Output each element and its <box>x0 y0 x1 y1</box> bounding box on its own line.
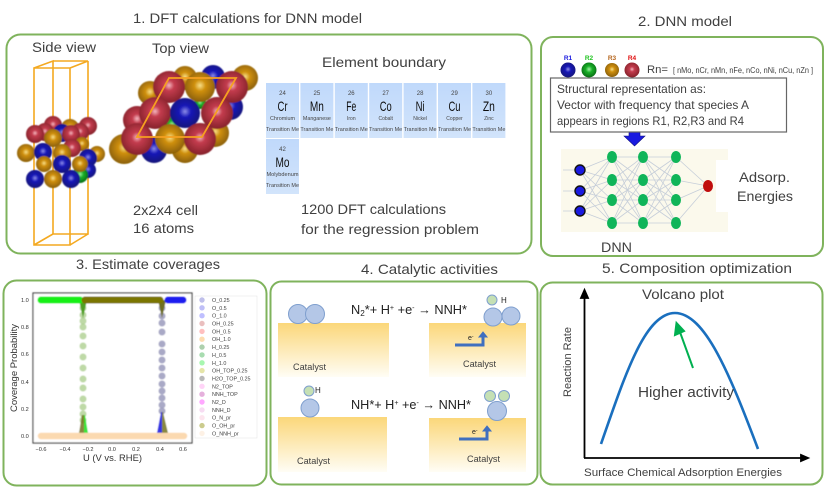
reaction 1 final state: Catalyst <box>463 359 496 370</box>
text: cell description: 16 atoms <box>133 220 194 236</box>
chart legend: N2_D <box>212 400 226 406</box>
text: DFT calculation count: 1200 DFT calculations <box>301 201 446 217</box>
equation: NH to NNH: - <box>416 400 420 407</box>
periodic table cells: Nickel <box>413 116 427 122</box>
periodic table cells: Co <box>380 98 392 114</box>
reaction 2 initial state: Catalyst <box>297 456 330 467</box>
chart legend: H_1.0 <box>212 361 226 367</box>
chart: coverage probability <box>33 293 192 443</box>
callout: structural representation: Structural representation as: <box>557 82 706 96</box>
periodic table cells: 42 <box>279 147 286 153</box>
chart axes <box>581 290 808 461</box>
volcano curve <box>601 313 758 449</box>
title: DNN model: 2. DNN model <box>638 13 732 29</box>
chart: volcano plot <box>581 290 808 461</box>
chart legend: H_0.5 <box>212 353 226 359</box>
periodic table cells <box>266 83 506 194</box>
label: adsorption energies: Energies <box>737 188 793 204</box>
icon: side view crystal structure <box>17 61 105 245</box>
equation: N2 to NNH: - <box>412 305 415 312</box>
periodic table cells: Molybdenum <box>266 172 298 178</box>
reaction 2 final state: e <box>472 429 476 436</box>
chart axis labels: 1.0 <box>21 298 29 304</box>
equation: N2 to NNH: *+ H <box>365 303 390 317</box>
text: DFT calculation count: for the regression problem <box>301 221 479 237</box>
diagram: neural network <box>561 149 728 232</box>
equation: NH to NNH: +e <box>398 398 417 412</box>
panel: DNN model <box>541 37 823 256</box>
reaction 2 final state: - <box>476 428 478 434</box>
title: composition optimization: 5. Composition optimization <box>602 260 792 276</box>
periodic table cells: Transition Me <box>335 127 368 133</box>
reaction 1 final state: - <box>472 334 474 340</box>
panel: composition optimization <box>540 282 822 484</box>
chart legend: NNH_TOP <box>212 392 238 398</box>
callout: structural representation: Vector with frequency that species A <box>557 98 749 112</box>
periodic table cells: Zinc <box>484 116 494 122</box>
label: side view: Side view <box>32 39 97 55</box>
reaction 2 initial state <box>278 386 387 472</box>
equation: N2 to NNH: N <box>351 303 360 317</box>
chart legend: H_0.25 <box>212 345 229 351</box>
periodic table cells: Transition Me <box>300 127 334 133</box>
text: Rn vector <box>647 64 813 76</box>
reaction 1 final state <box>429 295 526 377</box>
callout: structural representation: appears in regions R1, R2,R3 and R4 <box>557 114 744 128</box>
reaction 2 final state <box>429 390 526 472</box>
chart axis labels: 0.4 <box>21 380 29 386</box>
periodic table cells: Ni <box>416 98 425 114</box>
panel: estimate coverages <box>4 280 266 486</box>
chart axis labels: 0.6 <box>179 447 187 453</box>
periodic table cells: Fe <box>346 98 356 114</box>
title: estimate coverages: 3. Estimate coverages <box>76 256 220 272</box>
panel: DFT calculations <box>6 34 532 254</box>
title: DFT calculations: 1. DFT calculations for DNN model <box>133 10 362 26</box>
periodic table cells: 30 <box>486 91 493 97</box>
periodic table cells: 27 <box>382 91 390 97</box>
equation: N2 to NNH: +e <box>394 303 412 317</box>
label: surface chemical adsorption energies: Surface Chemical Adsorption Energies <box>584 467 783 479</box>
label: element boundary: Element boundary <box>322 54 446 70</box>
text: cell description: 2x2x4 cell <box>133 202 198 218</box>
callout: structural representation <box>550 78 786 132</box>
periodic table cells: 25 <box>314 91 321 97</box>
periodic table cells: 28 <box>417 91 424 97</box>
chart axis labels: 0.2 <box>21 407 29 413</box>
reaction 2 final state: Catalyst <box>467 454 500 465</box>
icon: top view crystal structure <box>109 65 258 164</box>
label: higher activity: Higher activity <box>638 384 735 401</box>
text: Rn vector: Rn= <box>647 64 668 76</box>
chart legend <box>195 296 257 438</box>
chart axis labels: −0.6 <box>35 447 47 453</box>
chart legend: NNH_D <box>212 408 231 414</box>
reaction 1 initial state: Catalyst <box>293 362 326 373</box>
chart legend: O_1.0 <box>212 314 227 320</box>
chart axis labels: Coverage Probability <box>9 324 20 412</box>
reaction 1 final state: H <box>501 296 507 305</box>
reaction 2 initial state: H <box>315 386 321 395</box>
text: cell description <box>133 202 198 236</box>
periodic table cells: Transition Me <box>472 127 506 133</box>
periodic table cells: Transition Me <box>369 127 402 133</box>
chart axis labels: 0.0 <box>108 447 116 453</box>
periodic table cells: 29 <box>451 91 458 97</box>
label: DNN: DNN <box>601 239 632 255</box>
chart axis labels <box>9 298 187 463</box>
title: catalytic activities: 4. Catalytic activities <box>361 261 498 277</box>
chart axis labels: 0.8 <box>21 325 29 331</box>
periodic table cells: Iron <box>347 116 356 122</box>
region legend atoms: R3 <box>608 55 617 62</box>
periodic table cells: Manganese <box>303 116 331 122</box>
chart axis labels: −0.2 <box>82 447 94 453</box>
chart legend: OH_0.25 <box>212 322 234 328</box>
periodic table cells: Transition Me <box>266 127 299 133</box>
equation: NH to NNH: NH*+ H <box>351 398 394 412</box>
chart legend: OH_0.5 <box>212 329 231 335</box>
periodic table cells: Cu <box>448 98 460 114</box>
chart axis labels: 0.6 <box>21 352 29 358</box>
periodic table cells: Mn <box>310 98 324 114</box>
chart legend: O_0.25 <box>212 298 230 304</box>
arrow: representation to DNN <box>624 130 645 146</box>
periodic table cells: Copper <box>446 116 463 122</box>
periodic table cells: Cobalt <box>378 116 394 122</box>
region legend atoms: R1 <box>564 55 573 62</box>
chart axis labels: 0.2 <box>132 447 140 453</box>
periodic table cells: 24 <box>279 91 286 97</box>
chart legend: O_NNH_pr <box>212 431 239 437</box>
label: adsorption energies <box>737 169 793 204</box>
chart legend: H2O_TOP_0.25 <box>212 376 251 382</box>
chart legend: O_OH_pr <box>212 424 235 430</box>
periodic table cells: Transition Me <box>404 127 437 133</box>
chart legend: OH_TOP_0.25 <box>212 369 248 375</box>
chart legend: N2_TOP <box>212 384 233 390</box>
chart legend: O_0.5 <box>212 306 227 312</box>
region legend atoms <box>560 55 640 78</box>
region legend atoms: R4 <box>628 55 637 62</box>
region legend atoms: R2 <box>585 55 594 62</box>
chart legend: OH_1.0 <box>212 337 231 343</box>
label: adsorption energies: Adsorp. <box>739 169 790 185</box>
equation: NH to NNH: → NNH* <box>419 398 471 412</box>
periodic table cells: Mo <box>276 154 290 170</box>
equation: N2 to NNH: → NNH* <box>415 303 467 317</box>
chart axis labels: −0.4 <box>59 447 71 453</box>
periodic table cells: Transition Me <box>438 127 471 133</box>
reaction 1 final state: e <box>468 335 472 342</box>
arrow: higher activity <box>675 323 693 368</box>
chart axis labels: 0.0 <box>21 434 29 440</box>
periodic table cells: 26 <box>348 91 355 97</box>
chart axis labels: 0.4 <box>156 447 164 453</box>
reaction 1 initial state <box>278 304 389 377</box>
chart legend: O_N_pr <box>212 416 231 422</box>
label: volcano plot: Volcano plot <box>642 286 724 302</box>
label: reaction rate: Reaction Rate <box>562 327 574 397</box>
text: DFT calculation count <box>301 201 479 237</box>
periodic table cells: Chromium <box>270 116 295 122</box>
panel: catalytic activities <box>270 282 538 484</box>
periodic table cells: Transition Me <box>266 183 299 189</box>
periodic table cells: Zn <box>483 98 495 114</box>
text: Rn vector: [ nMo, nCr, nMn, nFe, nCo, nNi, nCu, nZn ] <box>673 66 813 75</box>
equation: N2 to NNH: + <box>390 305 394 312</box>
periodic table cells: Cr <box>278 98 288 114</box>
label: top view: Top view <box>152 40 210 56</box>
chart axis labels: U (V vs. RHE) <box>83 453 142 463</box>
equation: NH to NNH: + <box>394 400 398 407</box>
equation: N2 to NNH: 2 <box>360 309 365 318</box>
